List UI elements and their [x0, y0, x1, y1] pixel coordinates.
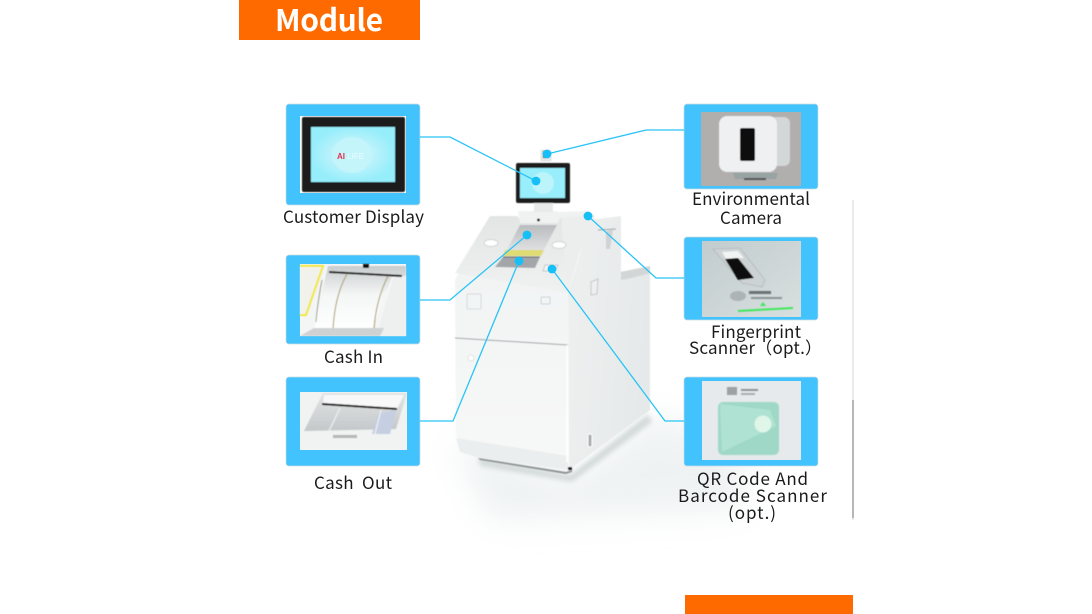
front panel	[455, 273, 568, 470]
machine illustration	[450, 150, 745, 520]
label: environmental camera: Environmental	[692, 185, 810, 210]
side shelf	[620, 268, 650, 430]
label: customer display: Customer Display	[283, 203, 424, 228]
panel: cash out	[286, 377, 420, 466]
label: qr code scanner: (opt.)	[728, 499, 776, 524]
panel: customer display	[286, 104, 420, 205]
camera	[541, 150, 551, 161]
front decals	[467, 294, 481, 309]
side slot details	[598, 229, 616, 230]
label: environmental camera	[692, 185, 810, 229]
label: qr code scanner: Barcode Scanner	[678, 482, 827, 507]
panel: environmental camera	[684, 104, 818, 189]
floor shadow	[450, 415, 745, 520]
title banner	[239, 0, 420, 40]
panel: cash in	[286, 255, 420, 344]
scanner window	[543, 265, 558, 271]
display bracket	[518, 211, 590, 223]
label: environmental camera: Camera	[720, 204, 782, 229]
door seam	[455, 338, 568, 345]
customer screen	[516, 163, 570, 203]
handle slot	[588, 434, 592, 447]
label: cash out: Cash Out	[314, 469, 393, 494]
panel: fingerprint scanner	[684, 237, 818, 320]
right side body	[568, 216, 650, 470]
label: fingerprint scanner: Scanner（opt.）	[689, 334, 822, 359]
cash trays	[503, 225, 557, 257]
callout dots	[515, 150, 592, 273]
screen logo: AI LIFE	[337, 152, 364, 161]
bottom plinth	[456, 438, 568, 470]
callout lines	[420, 130, 684, 421]
label: qr code scanner	[678, 465, 827, 524]
right edge rule	[852, 200, 854, 520]
label: fingerprint scanner: Fingerprint	[711, 318, 802, 343]
label: fingerprint scanner	[689, 318, 822, 359]
bottom orange bar	[685, 595, 853, 614]
label: cash in: Cash In	[324, 343, 383, 368]
sloped top	[455, 216, 590, 293]
panel: qr code scanner	[684, 377, 818, 466]
label: qr code scanner: QR Code And	[697, 465, 808, 490]
buttons on top	[484, 240, 498, 246]
